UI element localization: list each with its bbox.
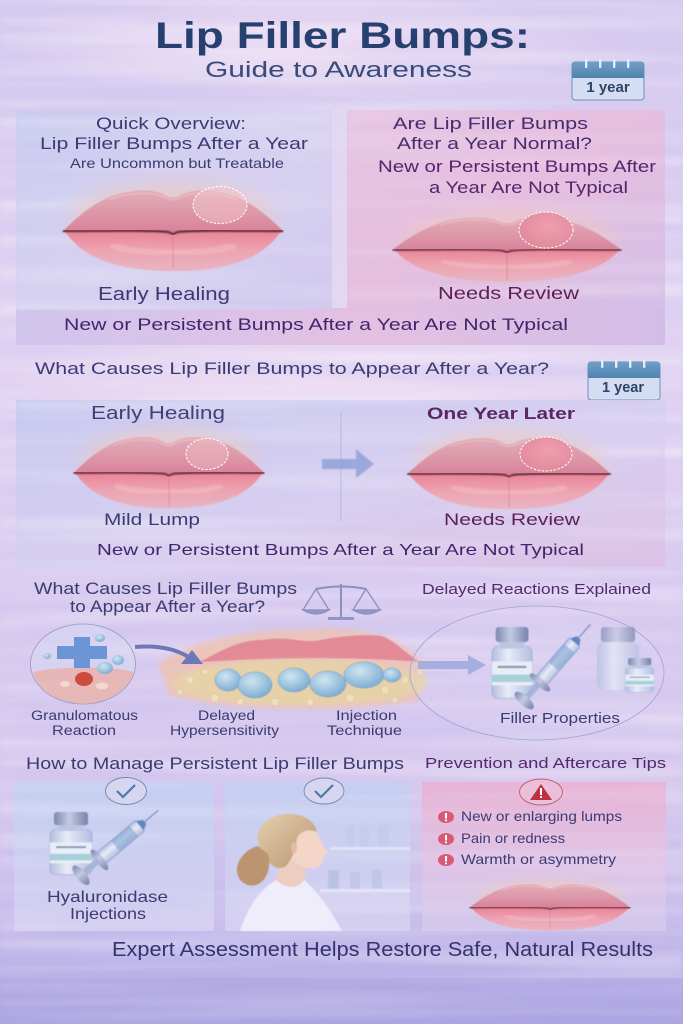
labels: causes: Granulomatous [31, 708, 138, 723]
labels: causes [31, 708, 620, 738]
panel: early healing vs one year later [16, 400, 665, 567]
labels: causes: Delayed [198, 708, 255, 723]
labels: causes: Filler Properties [500, 711, 620, 727]
panel: early healing vs one year later: New or Persistent Bumps After a Year Are Not Typical [97, 542, 584, 559]
panel: overview and normal [16, 110, 665, 345]
vial [492, 627, 532, 698]
panel: quick overview: Lip Filler Bumps After a Year [40, 134, 308, 153]
panel: hyaluronidase: Hyaluronidase [47, 889, 168, 906]
heading: causes: What Causes Lip Filler Bumps to Appear After a Year? [35, 359, 549, 378]
panel: overview and normal: New or Persistent Bumps After a Year Are Not Typical [64, 315, 568, 334]
heading: what causes, two lines [34, 579, 297, 616]
panel: are bumps normal: After a Year Normal? [397, 134, 592, 153]
panel: are bumps normal: Needs Review [438, 283, 579, 303]
icon: check second [304, 778, 344, 804]
panel: early healing vs one year later: Mild Lump [104, 510, 200, 529]
lips: one year later [407, 429, 611, 509]
lips: mild lump [74, 428, 264, 508]
labels: causes: Reaction [52, 723, 116, 738]
panel: quick overview: Quick Overview: [96, 115, 246, 133]
panel: warning signs [422, 779, 666, 931]
title [155, 15, 530, 82]
panel: quick overview: Are Uncommon but Treatable [70, 155, 284, 171]
pharmacy shelves [320, 825, 410, 892]
icon: calendar 1 year [572, 59, 644, 100]
woman in white coat [237, 814, 342, 931]
heading: how to manage: How to Manage Persistent Lip Filler Bumps [26, 755, 404, 773]
small bubbles [177, 669, 423, 706]
arrow: curved to lip [135, 647, 203, 664]
icon: warning [520, 779, 562, 805]
arrow: to filler properties [418, 655, 486, 675]
labels: causes: Technique [327, 723, 402, 738]
labels: causes: Injection [336, 708, 397, 723]
panel: quick overview: Early Healing [98, 283, 230, 304]
filler bubbles [215, 662, 401, 698]
panel: hyaluronidase [14, 778, 214, 931]
back bottle [597, 627, 639, 690]
small jar [625, 658, 654, 692]
lips: healthy [469, 878, 631, 931]
icon: granulomatous reaction circle [30, 624, 136, 704]
panel: early healing vs one year later: Early Healing [91, 403, 225, 423]
icon: calendar 1 year second: 1 year [602, 380, 644, 396]
panel: are bumps normal: New or Persistent Bumps After [378, 158, 657, 176]
arrow [322, 449, 374, 478]
list: warning signs: Warmth or asymmetry [461, 851, 616, 867]
vial and syringe [50, 800, 167, 888]
icon: balance scale [303, 584, 380, 620]
title: Guide to Awareness [205, 57, 472, 82]
title: Lip Filler Bumps: [155, 15, 530, 56]
labels: causes: Hypersensitivity [170, 723, 279, 738]
list: warning signs: Pain or redness [461, 830, 565, 846]
heading: prevention: Prevention and Aftercare Tips [425, 755, 666, 772]
icon: check [106, 778, 146, 804]
lips: needs review [393, 209, 621, 282]
panel: quick overview [16, 110, 332, 310]
heading: what causes, two lines: What Causes Lip Filler Bumps [34, 579, 297, 598]
closing statement: Expert Assessment Helps Restore Safe, Natural Results [112, 939, 653, 961]
icon: calendar 1 year: 1 year [586, 79, 630, 96]
illustration: filler properties circle [410, 606, 664, 740]
panel: clinician [225, 778, 410, 931]
syringe [511, 616, 600, 713]
heading: delayed reactions: Delayed Reactions Explained [422, 581, 651, 598]
heading: what causes, two lines: to Appear After a Year? [70, 597, 265, 616]
panel: are bumps normal: Are Lip Filler Bumps [393, 114, 588, 133]
lips: early healing [63, 180, 283, 271]
panel: are bumps normal [347, 110, 665, 310]
panel: hyaluronidase: Injections [70, 906, 146, 923]
panel: are bumps normal: a Year Are Not Typical [429, 179, 628, 197]
panel: early healing vs one year later: Needs Review [444, 510, 581, 529]
list: warning signs: New or enlarging lumps [461, 808, 622, 824]
list: warning signs [438, 808, 622, 867]
panel: early healing vs one year later: One Year Later [427, 404, 575, 423]
illustration: lip cross-section [158, 629, 428, 708]
icon: calendar 1 year second [588, 359, 660, 400]
